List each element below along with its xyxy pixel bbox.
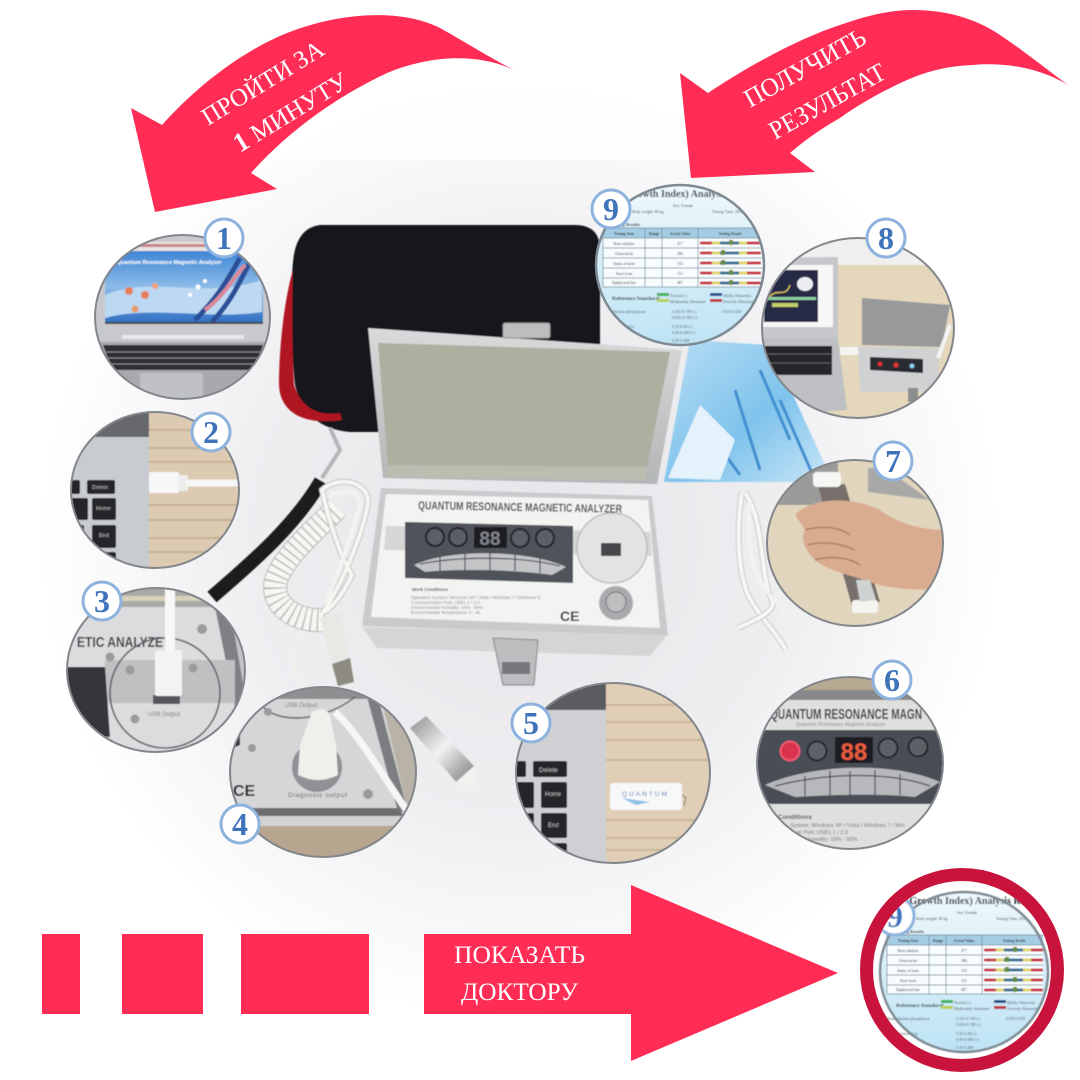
silver probe (410, 716, 478, 792)
diagnosis output (599, 586, 633, 620)
arrow label (739, 22, 891, 145)
work conditions: Communication Port: USB1.1 / 2.0 (411, 600, 480, 605)
step 5 photo: USB key: End (548, 823, 559, 829)
step 6 photo: control panel: 88 (841, 739, 867, 766)
result circle: enlarged report: Sex: Female (957, 910, 977, 915)
badge 9: 9 (603, 191, 619, 227)
step 9 photo: analysis report: Testing Results (611, 222, 640, 227)
result circle: enlarged report: 151 (961, 979, 967, 983)
white coiled cable (275, 482, 368, 690)
step 9 photo: analysis report: Normal (-) (670, 293, 688, 298)
step 6 photo: control panel (752, 661, 948, 852)
work conditions (411, 587, 541, 615)
result circle: enlarged report: Testing Item (898, 939, 919, 943)
lid (368, 328, 682, 484)
step 9 photo: analysis report: Bone alkaline phosphatase (603, 309, 646, 314)
step 8 photo: laptop and analyzer (758, 219, 958, 421)
step 9 photo: analysis report: 0.650-0.650 (722, 309, 741, 314)
step 9 photo: analysis report: 0.165-0.708 (-) (672, 309, 697, 314)
step 9 photo: analysis report: Osteocalcin (615, 252, 633, 256)
step 9 photo: analysis report: Bone alkaline (614, 242, 635, 246)
step 9 photo: analysis report: Sex: Female (673, 203, 693, 208)
step 9 photo: analysis report: Testing Item (614, 232, 635, 236)
result circle: enlarged report: Epiphyseal line (896, 988, 920, 992)
step 9 photo: analysis report: Short bone (616, 272, 633, 276)
step 6 photo: control panel: QUANTUM RESONANCE MAGN (770, 706, 922, 723)
result circle: enlarged report: Bone alkaline (898, 949, 919, 953)
step 9 photo: analysis report: 487 (677, 281, 683, 285)
badge 5: 5 (523, 705, 539, 741)
step 3 photo: USB into analyzer: ETIC ANALYZE (77, 634, 163, 651)
step 9 photo: analysis report: Testing Time: 2015 (712, 209, 743, 214)
result circle: enlarged report: Bone alkaline phosphatase (887, 1016, 930, 1021)
step 2 photo: USB into laptop (70, 410, 241, 570)
arrow label (454, 942, 585, 1006)
badge 9 (592, 190, 630, 228)
result circle: enlarged report: 0.35-0.48 (-) (956, 1031, 977, 1036)
front rim (362, 627, 667, 656)
USB output (577, 513, 647, 583)
booklet (664, 340, 833, 482)
wrist strap and clasp (212, 428, 340, 597)
result circle: enlarged report: Osteocalcin (899, 959, 917, 963)
arrow label: ПОКАЗАТЬ (454, 942, 585, 969)
badge 4: 4 (232, 806, 248, 842)
result circle: enlarged report: 0.35-0.480 (956, 1045, 973, 1050)
badge 8 (867, 219, 905, 257)
control display (405, 522, 573, 583)
badge 5 (512, 704, 550, 742)
step 9 photo: analysis report: 0.35-0.48 (-) (672, 324, 693, 329)
round plug (320, 612, 354, 686)
work conditions: Work Conditions (412, 587, 448, 592)
step 4 photo: probe connector (221, 685, 420, 861)
step 6 photo: control panel: Conditions (778, 814, 812, 821)
result circle: enlarged report: Testing Time: 2015 (996, 916, 1027, 921)
step 5 photo: USB key (512, 680, 714, 866)
arrow: get the result (680, 10, 1068, 178)
step 9 photo: analysis report: 151 (677, 272, 683, 276)
step 3 photo: USB into analyzer: USB Output (148, 712, 180, 718)
step 9 photo: analysis report: 153 (677, 262, 683, 266)
badge 8: 8 (878, 220, 894, 256)
step 9 photo: analysis report: Reference Standard: (612, 296, 661, 302)
step 1 photo: laptop (92, 219, 274, 402)
result circle: enlarged report: 477 (961, 949, 967, 953)
white zone behind top arrows (120, 0, 1080, 160)
result circle: enlarged report: 386 (961, 959, 967, 963)
arrow label: РЕЗУЛЬТАТ (764, 57, 891, 145)
badge 6 (873, 661, 911, 699)
result circle: enlarged report: Reference Standard: (896, 1003, 945, 1009)
result circle: enlarged report: Moderately Abnormal (954, 1006, 990, 1011)
carrying bag (279, 225, 600, 432)
work conditions: Environmental Humidity: 10% - 90% (411, 605, 483, 610)
white panel (371, 494, 660, 628)
badge 7 (874, 442, 912, 480)
control display: 88 (479, 529, 501, 550)
step 4 photo: probe connector: USB Output (285, 703, 317, 709)
result circle: enlarged report: 0.650-0.708 (+) (956, 1022, 982, 1027)
result circle: enlarged report: Osteocalcin (899, 1031, 918, 1036)
result circle: enlarged report (866, 874, 1058, 1066)
CE mark: CE (560, 608, 579, 624)
step 9 photo: analysis report: Status of bone (613, 262, 635, 266)
latch (493, 638, 538, 685)
result circle: enlarged report: Short bone (900, 979, 917, 983)
result circle: enlarged report: 9 (887, 898, 903, 934)
work conditions: Environmental Temperature: 5 - 40 (411, 610, 481, 615)
top latch (503, 323, 550, 338)
result circle: enlarged report: Range (933, 939, 943, 943)
step 9 photo: analysis report: Testing Result (719, 232, 742, 236)
step 6 photo: control panel: Humidity: 10% - 90% (806, 837, 857, 843)
badge 2 (192, 413, 230, 451)
step 9 photo: analysis report: Actual Value (670, 232, 691, 236)
step 9 photo: analysis report: Moderately Abnormal (670, 299, 706, 304)
result circle: enlarged report: Status of bone (897, 969, 919, 973)
step 9 photo: analysis report: (Growth Index) Analysis Report (622, 189, 760, 200)
step 9 photo: analysis report: 386 (677, 252, 683, 256)
step 9 photo: analysis report: 0.650-0.708 (+) (672, 315, 698, 320)
step 9 photo: analysis report (592, 183, 768, 348)
arrow label (197, 35, 353, 158)
step 9 photo: analysis report: Severely Abnormal (723, 299, 755, 304)
step 6 photo: control panel: System: Windows XP / Vista / Windows 7 / Win (790, 823, 905, 829)
grey band (384, 526, 652, 556)
badge 7: 7 (885, 443, 901, 479)
step 9 photo: analysis report: Osteocalcin (615, 324, 634, 329)
arrow label: ДОКТОРУ (461, 979, 578, 1006)
step 5 photo: USB key: Home (545, 792, 562, 798)
step 5 photo: USB key: QUANTUM (622, 791, 667, 798)
result circle: enlarged report: Body weight: 60 kg (916, 916, 948, 921)
result circle: enlarged report: Testing Results (895, 929, 924, 934)
badge 3: 3 (94, 583, 110, 619)
step 9 photo: analysis report: Epiphyseal line (612, 281, 636, 285)
result circle: enlarged report: 0.165-0.708 (-) (956, 1016, 981, 1021)
step 9 photo: analysis report: Body weight: 60 kg (632, 209, 664, 214)
badge 2: 2 (203, 414, 219, 450)
result circle: enlarged report: 0.49-0.480 (+) (956, 1037, 980, 1042)
base (362, 488, 668, 636)
step 6 photo: control panel: on Port: USB1.1 / 2.0 (796, 830, 848, 836)
arrow: complete in one minute (131, 15, 518, 212)
badge 6: 6 (884, 662, 900, 698)
result circle: enlarged report: Testing Result (1003, 939, 1026, 943)
step 9 photo: analysis report: 0.35-0.480 (672, 338, 689, 343)
step 9 photo: analysis report: Range (649, 232, 659, 236)
arrow label: ПРОЙТИ ЗА (197, 35, 329, 131)
step 2 photo: USB into laptop: Delete (92, 485, 108, 491)
step 2 photo: USB into laptop: End (99, 533, 109, 539)
step 6 photo: control panel: Quantum Resonance Magnetic Analyzer (796, 722, 886, 728)
step 5 photo: USB key: Delete (539, 767, 558, 774)
step 4 photo: probe connector: Diagnosis output (288, 792, 347, 799)
step 3 photo: USB into analyzer (65, 582, 250, 755)
result circle: enlarged report: 487 (961, 988, 967, 992)
step 9 photo: analysis report: 0.49-0.480 (+) (672, 330, 696, 335)
product photo: bag, booklet, analyzer and cables (212, 225, 833, 792)
model name: QUANTUM RESONANCE MAGNETIC ANALYZER (418, 500, 623, 516)
step 4 photo: probe connector: CE (233, 783, 256, 800)
step 9 photo: analysis report: 477 (677, 242, 683, 246)
result circle: enlarged report: Normal (-) (954, 1000, 972, 1005)
badge 4 (221, 805, 259, 843)
badge 1 (205, 219, 243, 257)
badge 1: 1 (216, 220, 232, 256)
step 2 photo: USB into laptop: Home (96, 506, 111, 512)
result circle: enlarged report: Severely Abnormal (1007, 1006, 1039, 1011)
arrow: show the doctor (424, 885, 838, 1061)
work conditions: Operation System: Windows XP / Vista / Windows 7 / Windows 8 (411, 595, 541, 600)
step 1 photo: laptop: Quantum Resonance Magnetic Analyzer (117, 260, 222, 266)
badge 3 (83, 582, 121, 620)
white USB cable (738, 492, 790, 650)
result circle: enlarged report: Actual Value (954, 939, 975, 943)
step 9 photo: analysis report: Mildly Abnormal (723, 293, 752, 298)
bottom progress blocks (42, 934, 369, 1014)
result circle: enlarged report: 0.650-0.650 (1006, 1016, 1025, 1021)
step 7 photo: hand with probe (765, 442, 947, 630)
arrow label: 1 МИНУТУ (227, 65, 353, 158)
analyzer case (362, 323, 682, 685)
result circle: enlarged report: (Growth Index) Analysis Report (906, 896, 1044, 907)
arrow label: ПОЛУЧИТЬ (739, 22, 871, 113)
result circle: enlarged report: Mildly Abnormal (1007, 1000, 1036, 1005)
result circle: enlarged report: 153 (961, 969, 967, 973)
